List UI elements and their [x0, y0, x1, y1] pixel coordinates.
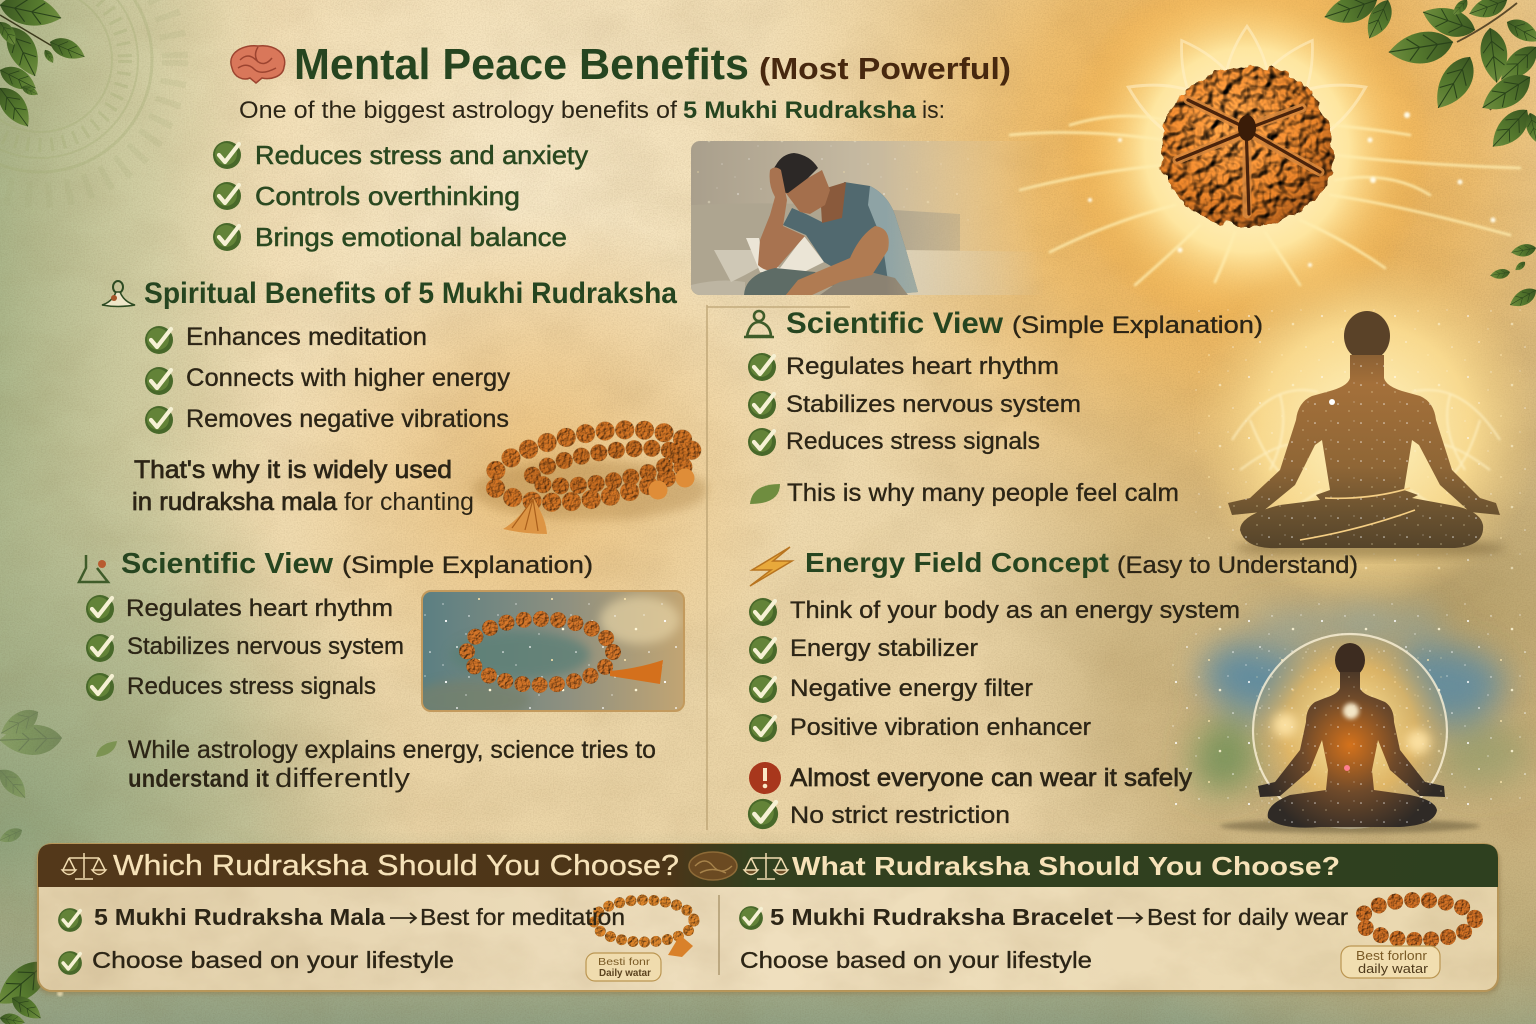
panel header: What Rudraksha Should You Choose? — [792, 851, 1340, 881]
arms — [758, 168, 805, 270]
foliage top left — [0, 0, 88, 133]
icon: scientist — [744, 311, 774, 337]
list: scientific view left: Reduces stress signals — [127, 673, 376, 700]
badge: Besti fonr — [598, 957, 651, 968]
list: energy field concept: Energy Field Concept — [805, 547, 1109, 578]
image: mala with tassel — [594, 900, 694, 957]
safety notes: No strict restriction — [790, 802, 1010, 829]
bracelet option: Choose based on your lifestyle — [740, 947, 1092, 973]
list: mental peace benefits — [213, 140, 588, 252]
title — [231, 40, 1011, 89]
list: spiritual benefits — [102, 277, 677, 434]
list: energy field concept: Think of your body as an energy system — [790, 597, 1240, 624]
list: scientific view right: This is why many people feel calm — [787, 479, 1179, 507]
title: Mental Peace Benefits — [294, 40, 749, 89]
list: energy field concept: Negative energy filter — [790, 675, 1033, 702]
torso — [783, 182, 918, 295]
list: scientific view right — [744, 307, 1263, 507]
list: scientific view left: Regulates heart rhythm — [126, 595, 393, 622]
panel: which rudraksha to choose — [36, 844, 1500, 994]
list: spiritual benefits: Enhances meditation — [186, 323, 427, 351]
mala option: Best for meditation — [420, 904, 625, 930]
list: scientific view right: (Simple Explanation) — [1012, 312, 1263, 339]
list: scientific view left: Scientific View — [121, 548, 333, 580]
list: energy field concept — [749, 547, 1358, 742]
safety notes — [748, 762, 1193, 829]
glowing rudraksha seed — [1010, 0, 1520, 340]
list: scientific view right: Reduces stress signals — [786, 428, 1040, 455]
badge — [586, 953, 661, 981]
lotus outline — [1117, 26, 1377, 167]
list: scientific view right: Regulates heart rhythm — [786, 353, 1059, 380]
badge — [1341, 946, 1440, 978]
legs — [744, 268, 835, 295]
intro line: is: — [922, 97, 945, 124]
foliage top right — [1321, 0, 1536, 312]
seed ridges — [1177, 100, 1320, 214]
bracelet option: 5 Mukhi Rudraksha Bracelet — [770, 904, 1113, 930]
list: spiritual benefits: Removes negative vibrations — [186, 405, 509, 433]
figure — [1258, 643, 1445, 828]
note: astrology vs science: differently — [275, 763, 411, 793]
panel header — [62, 850, 1340, 882]
mala note: That's why it is widely used — [134, 456, 452, 484]
bracelet option: Best for daily wear — [1147, 904, 1348, 930]
icon: brain — [231, 46, 285, 83]
list: energy field concept: Energy stabilizer — [790, 635, 978, 662]
seed body — [1161, 66, 1334, 227]
image: rudraksha mala — [472, 418, 708, 534]
list: scientific view right: Stabilizes nervous system — [786, 391, 1081, 418]
note: astrology vs science: While astrology explains energy, science tries to — [128, 736, 656, 764]
photo: bracelet on cosmic stone — [410, 591, 684, 720]
intro line: One of the biggest astrology benefits of — [239, 97, 677, 124]
neck — [820, 182, 846, 223]
mala option: Choose based on your lifestyle — [92, 947, 454, 973]
foliage left and bottom left — [0, 704, 63, 1024]
face — [785, 170, 830, 214]
list: scientific view left: (Simple Explanation) — [342, 552, 593, 579]
title: (Most Powerful) — [759, 51, 1011, 86]
list: spiritual benefits: Connects with higher energy — [186, 364, 510, 392]
list: mental peace benefits: Brings emotional balance — [255, 222, 567, 252]
icon: warning — [749, 762, 781, 794]
seed cracks — [1177, 100, 1320, 214]
mala note — [132, 456, 474, 516]
tassel — [503, 497, 547, 534]
badge: daily watar — [1358, 961, 1429, 976]
list: mental peace benefits: Reduces stress and anxiety — [255, 140, 588, 170]
mala option: 5 Mukhi Rudraksha Mala — [94, 904, 385, 930]
list: scientific view right: Scientific View — [786, 307, 1004, 340]
list: energy field concept: Positive vibration enhancer — [790, 714, 1091, 741]
image: bracelet — [1361, 900, 1475, 940]
mala option — [58, 904, 625, 975]
intro line — [239, 97, 945, 124]
list: energy field concept: (Easy to Understand) — [1117, 552, 1358, 579]
figure — [1228, 311, 1500, 548]
tassel — [610, 660, 663, 684]
badge: Best forlonr — [1356, 948, 1428, 963]
icon: lightning — [750, 547, 792, 586]
mala note: for chanting — [344, 488, 474, 516]
icon: meditator — [102, 281, 135, 306]
safety notes: Almost everyone can wear it safely — [790, 764, 1193, 792]
intro line: 5 Mukhi Rudraksha — [683, 97, 917, 124]
icon: flask — [79, 555, 108, 582]
list: spiritual benefits: Spiritual Benefits of 5 Mukhi Rudraksha — [144, 277, 677, 310]
hair — [772, 153, 818, 193]
list: scientific view left — [79, 548, 593, 701]
badge: Daily watar — [599, 968, 651, 979]
panel header: Which Rudraksha Should You Choose? — [113, 850, 679, 882]
sofa — [691, 203, 960, 295]
list: mental peace benefits: Controls overthinking — [255, 181, 520, 211]
note: astrology vs science: understand it — [128, 765, 270, 793]
mala note: in rudraksha mala — [132, 488, 337, 516]
energy rays — [1010, 116, 1520, 285]
photo: stressed man — [691, 141, 1051, 296]
note: astrology vs science — [96, 736, 656, 793]
bracelet option — [739, 904, 1348, 973]
nebula meditator with halo — [1170, 600, 1536, 833]
meditator with golden aura — [1190, 255, 1536, 605]
list: scientific view left: Stabilizes nervous system — [127, 633, 404, 660]
